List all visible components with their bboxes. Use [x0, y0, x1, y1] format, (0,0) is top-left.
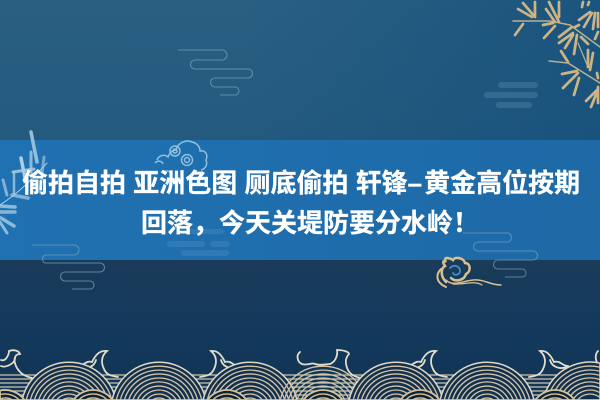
- icon: faint cloud blocks top right: [484, 82, 538, 108]
- icon: cloud lines right: [463, 233, 538, 277]
- background shading right: [0, 0, 600, 140]
- icon: faint cloud blocks in band: [167, 229, 230, 256]
- icon: cloud lines lower left: [32, 245, 105, 289]
- icon: golden bamboo top right: [513, 2, 600, 107]
- icon: golden cloud: [437, 258, 501, 287]
- title: [22, 168, 580, 238]
- icon: pale bamboo left: [0, 132, 47, 233]
- icon: cloud lines top left: [178, 50, 252, 95]
- right edge dome: [543, 362, 600, 400]
- title line 2: 回落，今天关堤防要分水岭！: [141, 208, 479, 238]
- waves: [0, 350, 600, 400]
- wave crests: [1, 350, 598, 378]
- wave domes: [22, 362, 534, 400]
- lower wave domes: [74, 390, 574, 400]
- wave strips behind the domes: [0, 375, 600, 399]
- left edge lower dome: [0, 390, 24, 400]
- icon: swirl cloud: [155, 141, 207, 174]
- panel: title band: [0, 140, 600, 260]
- title line 1: 偷拍自拍 亚洲色图 厕底偷拍 轩锋–黄金高位按期: [22, 168, 580, 198]
